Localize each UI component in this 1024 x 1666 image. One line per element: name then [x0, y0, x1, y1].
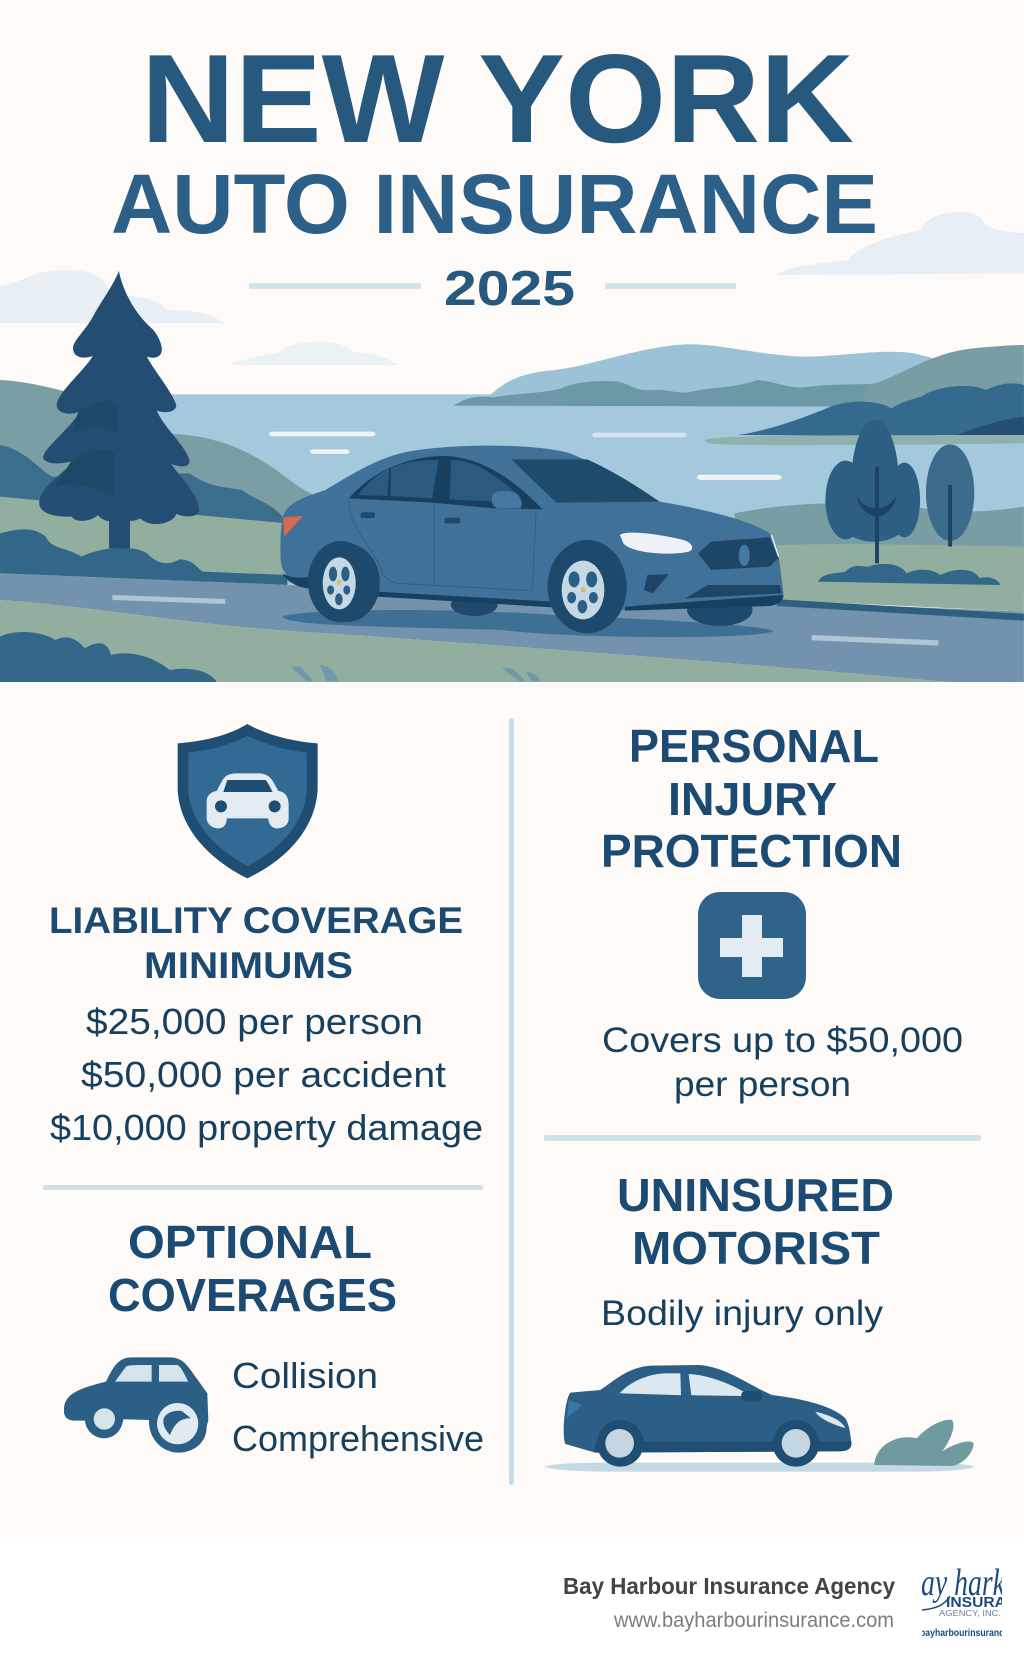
hero landscape illustration: [0, 212, 1024, 682]
icon: compact car: [64, 1357, 208, 1453]
panel: optional coverages: [64, 1216, 484, 1459]
year with side rules: [249, 262, 736, 316]
coverage text: Bodily injury only: [601, 1294, 884, 1333]
heading: MOTORIST: [632, 1222, 880, 1274]
heading: INJURY: [668, 773, 837, 825]
coverage text: Covers up to $50,000: [602, 1021, 963, 1060]
panel: liability coverage minimums: [49, 724, 483, 1148]
footer: agency name and website: [563, 1573, 895, 1632]
icon: side-view car and bush: [544, 1365, 974, 1472]
title: NEW YORK: NEW YORK: [141, 28, 854, 169]
heading: [601, 720, 902, 877]
coverage text: [602, 1021, 963, 1104]
coverage list: [232, 1355, 484, 1459]
footer: cropped agency logo: bayharbourinsuranc: [920, 1628, 1004, 1639]
minimum amounts: $50,000 per accident: [81, 1054, 446, 1095]
heading: UNINSURED: [617, 1169, 894, 1221]
coverage text: per person: [674, 1065, 851, 1104]
heading: MINIMUMS: [144, 945, 353, 986]
footer: cropped agency logo: INSURA: [946, 1594, 1006, 1611]
heading: [108, 1216, 397, 1321]
clouds: [0, 212, 1024, 323]
panel: personal injury protection: [601, 720, 963, 1104]
heading: [617, 1169, 894, 1274]
heading: OPTIONAL: [128, 1216, 372, 1268]
icon: pine tree: [39, 271, 199, 548]
heading: PROTECTION: [601, 825, 902, 877]
heading: PERSONAL: [629, 720, 879, 772]
footer: agency name and website: Bay Harbour Insurance Agency: [563, 1573, 895, 1599]
icon: blue sedan: [280, 446, 783, 637]
minimum amounts: $10,000 property damage: [50, 1107, 483, 1148]
footer: cropped agency logo: [922, 1568, 1002, 1638]
minimum amounts: $25,000 per person: [86, 1001, 423, 1042]
vertical divider: [509, 718, 514, 1485]
coverage list: Collision: [232, 1355, 378, 1396]
icon: shield with car: [178, 724, 318, 878]
heading: [49, 900, 463, 986]
lake, hills and road scenery: [0, 342, 1024, 682]
footer: agency name and website: www.bayharbourinsurance.com: [613, 1609, 894, 1632]
heading: LIABILITY COVERAGE: [49, 900, 463, 941]
icon: medical cross: [698, 892, 806, 999]
minimum amounts: [50, 1001, 483, 1148]
subtitle: AUTO INSURANCE: AUTO INSURANCE: [111, 157, 878, 251]
year with side rules: 2025: [444, 262, 575, 316]
divider: right column: [544, 1135, 981, 1141]
heading: COVERAGES: [108, 1269, 397, 1321]
divider: left column: [43, 1185, 483, 1190]
icon: round trees and bush: [818, 420, 1000, 585]
panel: uninsured motorist: [544, 1169, 974, 1472]
coverage list: Comprehensive: [232, 1418, 484, 1459]
footer: cropped agency logo: AGENCY, INC.: [939, 1609, 1001, 1618]
